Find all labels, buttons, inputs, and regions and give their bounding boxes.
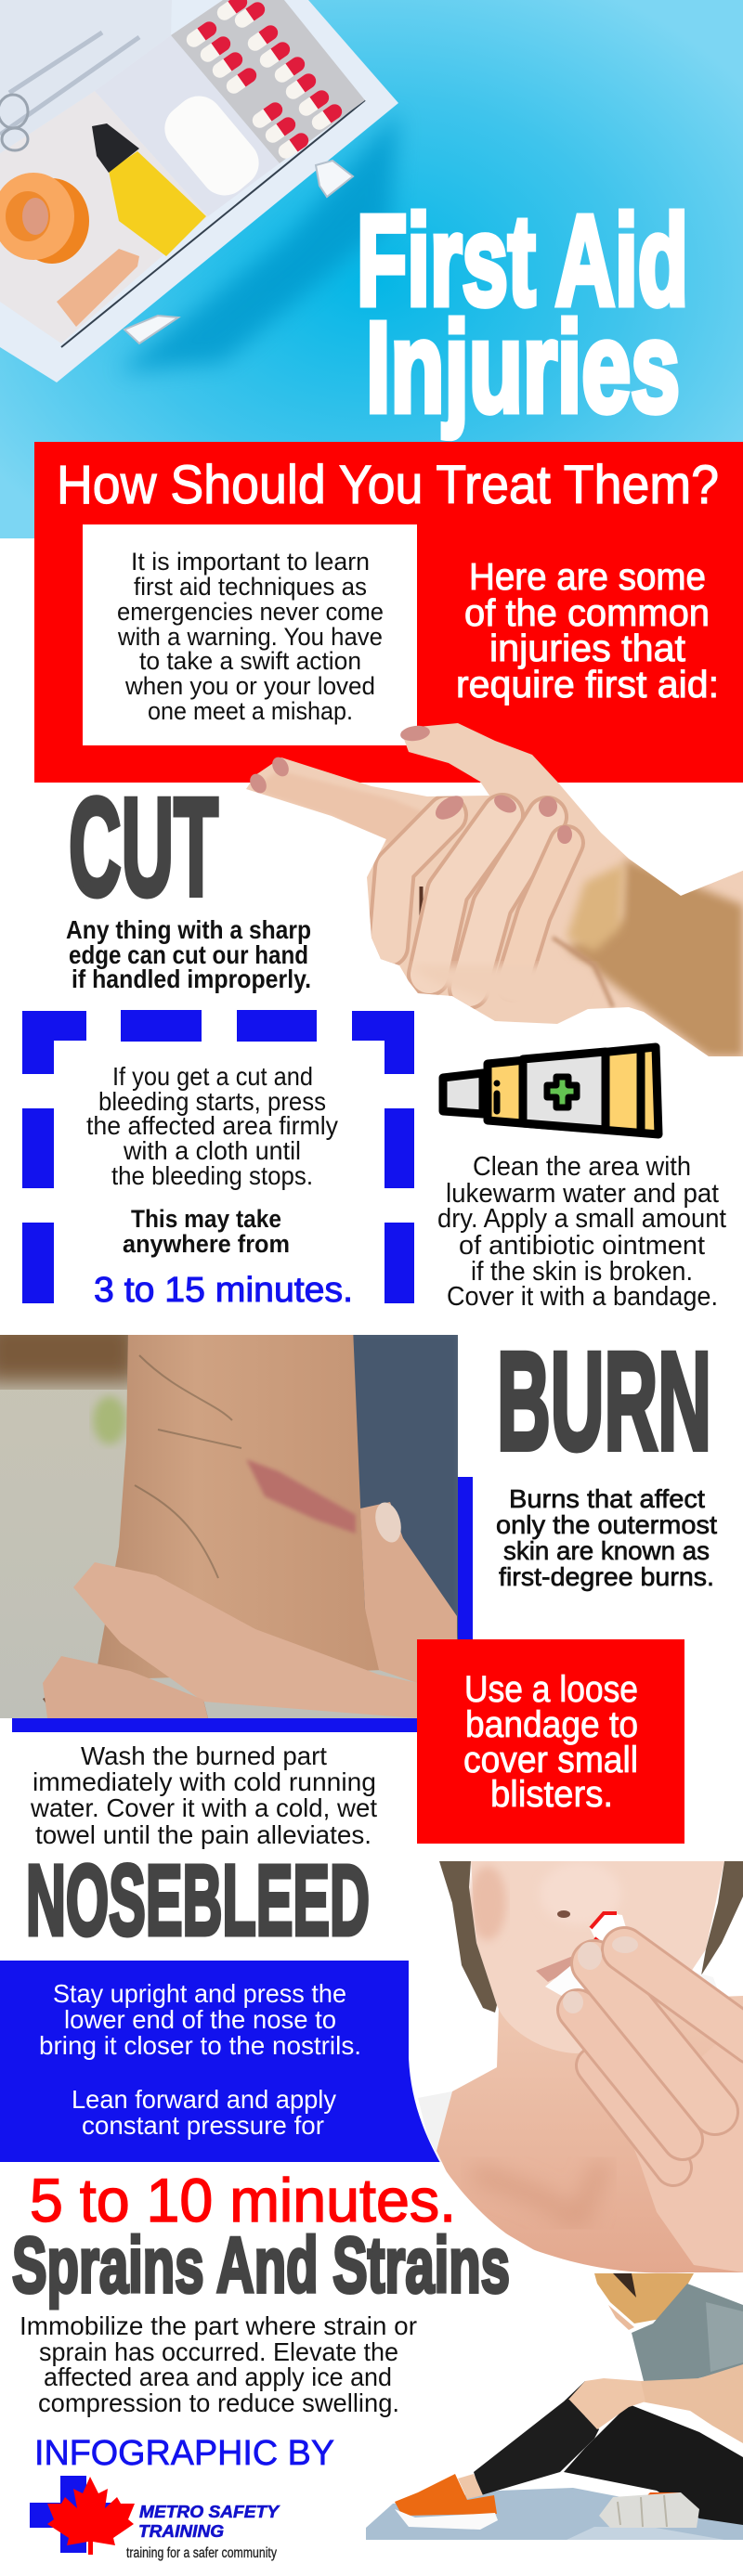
- hand photo: [241, 715, 743, 1068]
- blue photo accents: [12, 1477, 473, 1732]
- lead-in text: require first aid:: [456, 663, 719, 705]
- logo: metro safety training: [30, 2476, 280, 2561]
- duration note: 3 to 15 minutes.: [94, 1271, 353, 1310]
- burn description: only the outermost: [496, 1510, 717, 1539]
- burn treatment text: [30, 1741, 377, 1849]
- sprain treatment text: sprain has occurred. Elevate the: [39, 2337, 398, 2366]
- wound care text: [437, 1152, 726, 1312]
- burn treatment text: immediately with cold running: [33, 1767, 376, 1796]
- highlight: duration: 5 to 10 minutes.: [30, 2166, 456, 2234]
- wound care text: if the skin is broken.: [471, 1257, 693, 1287]
- wound care text: lukewarm water and pat: [446, 1179, 719, 1209]
- panel: nosebleed advice: constant pressure for: [82, 2111, 324, 2140]
- shirt: [418, 2091, 452, 2163]
- duration note: anywhere from: [123, 1230, 290, 1258]
- intro white card: one meet a mishap.: [148, 697, 353, 725]
- heading: cut: CUT: [69, 769, 218, 925]
- logo: metro safety training: METRO SAFETY: [139, 2503, 280, 2521]
- hand on knee: [568, 2378, 645, 2429]
- first aid kit photo: [0, 0, 398, 382]
- ankle: [458, 2474, 483, 2499]
- legs: [564, 2404, 743, 2525]
- burn description: [496, 1484, 717, 1591]
- lead-in text: [456, 555, 719, 705]
- cut description: [66, 915, 311, 993]
- heading: nosebleed: NOSEBLEED: [26, 1844, 370, 1956]
- nosebleed photo: [399, 1857, 743, 2284]
- gauze roll: [155, 86, 268, 205]
- face: [471, 1861, 724, 2053]
- bleeding advice text: bleeding starts, press: [98, 1087, 326, 1116]
- bleeding advice text: with a cloth until: [123, 1136, 301, 1165]
- burn photo: [0, 1318, 464, 1718]
- orange tape roll: [0, 173, 89, 264]
- intro white card: [83, 524, 417, 745]
- lead-in text: Here are some: [469, 555, 706, 598]
- adhesive bandage: [57, 249, 139, 327]
- callout: loose bandage: blisters.: [490, 1774, 613, 1815]
- fingernails: [247, 724, 572, 844]
- mat: [366, 2488, 743, 2540]
- box clasps: [124, 161, 353, 343]
- callout: loose bandage: bandage to: [465, 1704, 638, 1745]
- duration note: [94, 1205, 353, 1310]
- cut description: Any thing with a sharp: [66, 915, 311, 944]
- intro white card: to take a swift action: [139, 647, 361, 675]
- header sky background: [0, 0, 743, 538]
- callout: loose bandage: Use a loose: [464, 1669, 638, 1710]
- wound care text: dry. Apply a small amount: [437, 1204, 726, 1234]
- logo: metro safety training: training for a safer community: [126, 2545, 277, 2561]
- logo: metro safety training: TRAINING: [138, 2522, 224, 2541]
- bleeding advice text: [86, 1062, 338, 1190]
- chest and neck: [437, 1996, 743, 2274]
- panel: nosebleed advice: bring it closer to the nostrils.: [39, 2031, 361, 2060]
- hair and face: [608, 2305, 634, 2330]
- intro white card: It is important to learn: [131, 548, 370, 576]
- lead-in text: injuries that: [489, 627, 686, 669]
- shirt: [632, 2284, 743, 2400]
- arm: [585, 2364, 743, 2443]
- lead-in text: of the common: [464, 591, 710, 634]
- burn treatment text: towel until the pain alleviates.: [35, 1820, 372, 1849]
- panel: nosebleed advice: [0, 1961, 442, 2162]
- burn treatment text: Wash the burned part: [81, 1741, 327, 1770]
- bleeding advice text: If you get a cut and: [112, 1062, 313, 1091]
- lips: [536, 1957, 571, 1982]
- blue cross: [30, 2476, 119, 2553]
- sprain treatment text: [20, 2311, 417, 2417]
- credit heading: INFOGRAPHIC BY: [34, 2434, 334, 2473]
- interlaced fingers: [388, 815, 567, 989]
- hand: [634, 2074, 743, 2272]
- hair: [439, 1861, 497, 2013]
- wound care text: Clean the area with: [473, 1152, 691, 1182]
- panel: intro: [34, 442, 743, 783]
- duration note: This may take: [131, 1205, 281, 1233]
- callout: loose bandage: [417, 1639, 684, 1844]
- sprain treatment text: affected area and apply ice and: [44, 2362, 392, 2391]
- sprain photo: [366, 2273, 743, 2540]
- burn treatment text: water. Cover it with a cold, wet: [30, 1793, 377, 1822]
- icon: ointment tube: [443, 1047, 658, 1134]
- panel: nosebleed advice: lower end of the nose to: [64, 2005, 336, 2034]
- orange shoe: [395, 2474, 498, 2530]
- title: [357, 189, 688, 439]
- yellow bottle: [92, 123, 206, 256]
- burn description: skin are known as: [503, 1536, 710, 1565]
- burn description: first-degree burns.: [499, 1562, 714, 1591]
- burn description: Burns that affect: [509, 1484, 705, 1513]
- intro white card: emergencies never come: [117, 598, 384, 626]
- cut description: edge can cut our hand: [69, 940, 308, 969]
- intro white card: with a warning. You have: [117, 623, 383, 651]
- dashed blue frame: [22, 1010, 414, 1303]
- cut description: if handled improperly.: [72, 964, 311, 993]
- fingernails: [563, 1936, 638, 2013]
- panel: nosebleed advice: Lean forward and apply: [72, 2085, 336, 2114]
- sprain treatment text: Immobilize the part where strain or: [20, 2311, 417, 2340]
- heading: sprains and strains: Sprains And Strains: [12, 2221, 510, 2309]
- second shoe sole: [599, 2492, 699, 2528]
- sprain treatment text: compression to reduce swelling.: [38, 2388, 399, 2417]
- bleeding advice text: the affected area firmly: [86, 1111, 338, 1140]
- wound care text: Cover it with a bandage.: [447, 1282, 718, 1312]
- callout: loose bandage: cover small: [463, 1740, 638, 1780]
- pill blister pack: [171, 0, 365, 163]
- maple leaf: [47, 2477, 135, 2555]
- wound care text: of antibiotic ointment: [459, 1231, 705, 1261]
- bleeding advice text: the bleeding stops.: [111, 1161, 313, 1190]
- panel: nosebleed advice: Stay upright and press the: [53, 1979, 346, 2008]
- intro white card: first aid techniques as: [134, 573, 367, 601]
- tissue: [545, 1966, 585, 1996]
- intro white card: when you or your loved: [124, 672, 375, 700]
- fingers: [360, 1502, 457, 1683]
